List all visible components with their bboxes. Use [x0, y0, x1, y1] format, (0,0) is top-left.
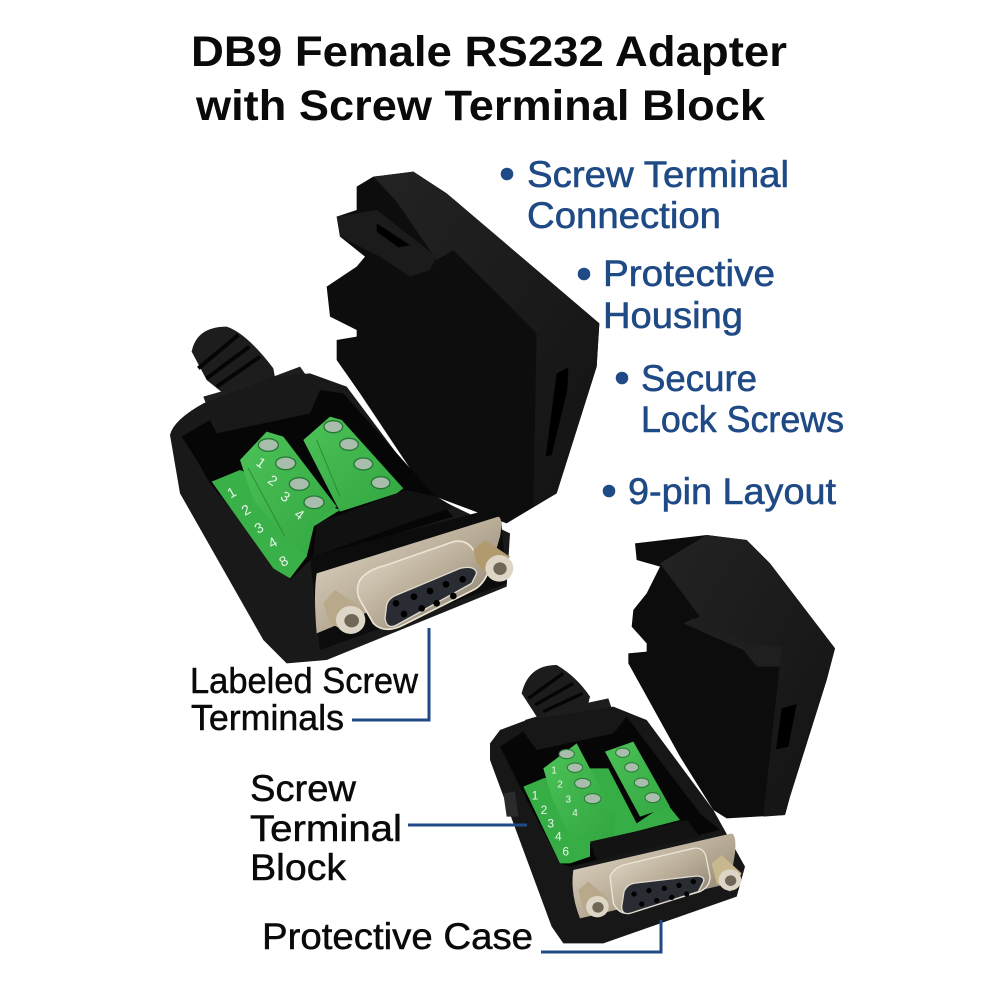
- base housing: [170, 373, 510, 663]
- pin numbers: 6: [562, 845, 569, 859]
- feature: screw terminal connection: Connection: [527, 195, 721, 236]
- callout: screw terminal block: Screw: [250, 768, 356, 809]
- cable boot: [522, 665, 617, 750]
- pin numbers: 4: [265, 533, 280, 551]
- callout: protective case: [262, 916, 661, 957]
- callout: screw terminal block: Terminal: [250, 808, 402, 849]
- pin numbers: 1: [551, 765, 557, 776]
- pin numbers: 1: [253, 454, 269, 471]
- base housing: [490, 707, 745, 943]
- screws: [258, 421, 390, 509]
- feature: secure lock screws: Secure: [641, 358, 757, 399]
- pin numbers: 1: [532, 788, 539, 802]
- feature: secure lock screws: [616, 358, 844, 440]
- DB9 metal shell: [315, 517, 513, 634]
- pin numbers: 8: [276, 552, 291, 570]
- callout: screw terminal block: [250, 768, 527, 888]
- lock screws: [323, 540, 513, 634]
- large connector photo: [170, 172, 599, 663]
- pin numbers: 4: [292, 505, 307, 523]
- feature: screw terminal connection: Screw Terminal: [527, 154, 789, 195]
- lid: [327, 172, 599, 523]
- pin numbers: [224, 454, 307, 570]
- feature: protective housing: Protective: [603, 253, 775, 294]
- feature: protective housing: Housing: [603, 295, 743, 336]
- lid: [628, 535, 835, 818]
- pin numbers: 3: [547, 816, 554, 830]
- feature: 9-pin layout: 9-pin Layout: [628, 471, 837, 512]
- callout: labeled screw terminals: [190, 628, 429, 738]
- pin numbers: 2: [265, 471, 281, 489]
- pin numbers: [532, 765, 578, 859]
- callout: protective case: Protective Case: [262, 916, 533, 957]
- callout: screw terminal block: Block: [250, 847, 347, 888]
- feature list: [501, 154, 844, 512]
- pin numbers: 3: [278, 488, 293, 505]
- pin numbers: 1: [224, 483, 239, 501]
- title: with Screw Terminal Block: [195, 82, 765, 130]
- feature: secure lock screws: Lock Screws: [641, 399, 844, 440]
- small connector photo: [490, 535, 835, 943]
- pin numbers: 4: [555, 830, 562, 844]
- feature: protective housing: [578, 253, 775, 336]
- title: [191, 28, 787, 130]
- green terminal board: [523, 742, 700, 863]
- lock screws: [578, 855, 742, 917]
- callout: labeled screw terminals: Terminals: [191, 697, 344, 738]
- pin numbers: 2: [541, 803, 548, 817]
- pin numbers: 3: [251, 519, 266, 537]
- green terminal board: [212, 417, 403, 578]
- pin numbers: 3: [566, 794, 572, 805]
- title: DB9 Female RS232 Adapter: [191, 28, 787, 76]
- callout: labeled screw terminals: Labeled Screw: [190, 660, 419, 701]
- pin numbers: 2: [557, 779, 563, 790]
- pin numbers: 2: [238, 501, 253, 519]
- pin numbers: 4: [572, 808, 578, 819]
- DB9 metal shell: [572, 833, 742, 918]
- feature: screw terminal connection: [501, 154, 789, 236]
- screws: [559, 748, 660, 804]
- cable boot: [192, 327, 317, 433]
